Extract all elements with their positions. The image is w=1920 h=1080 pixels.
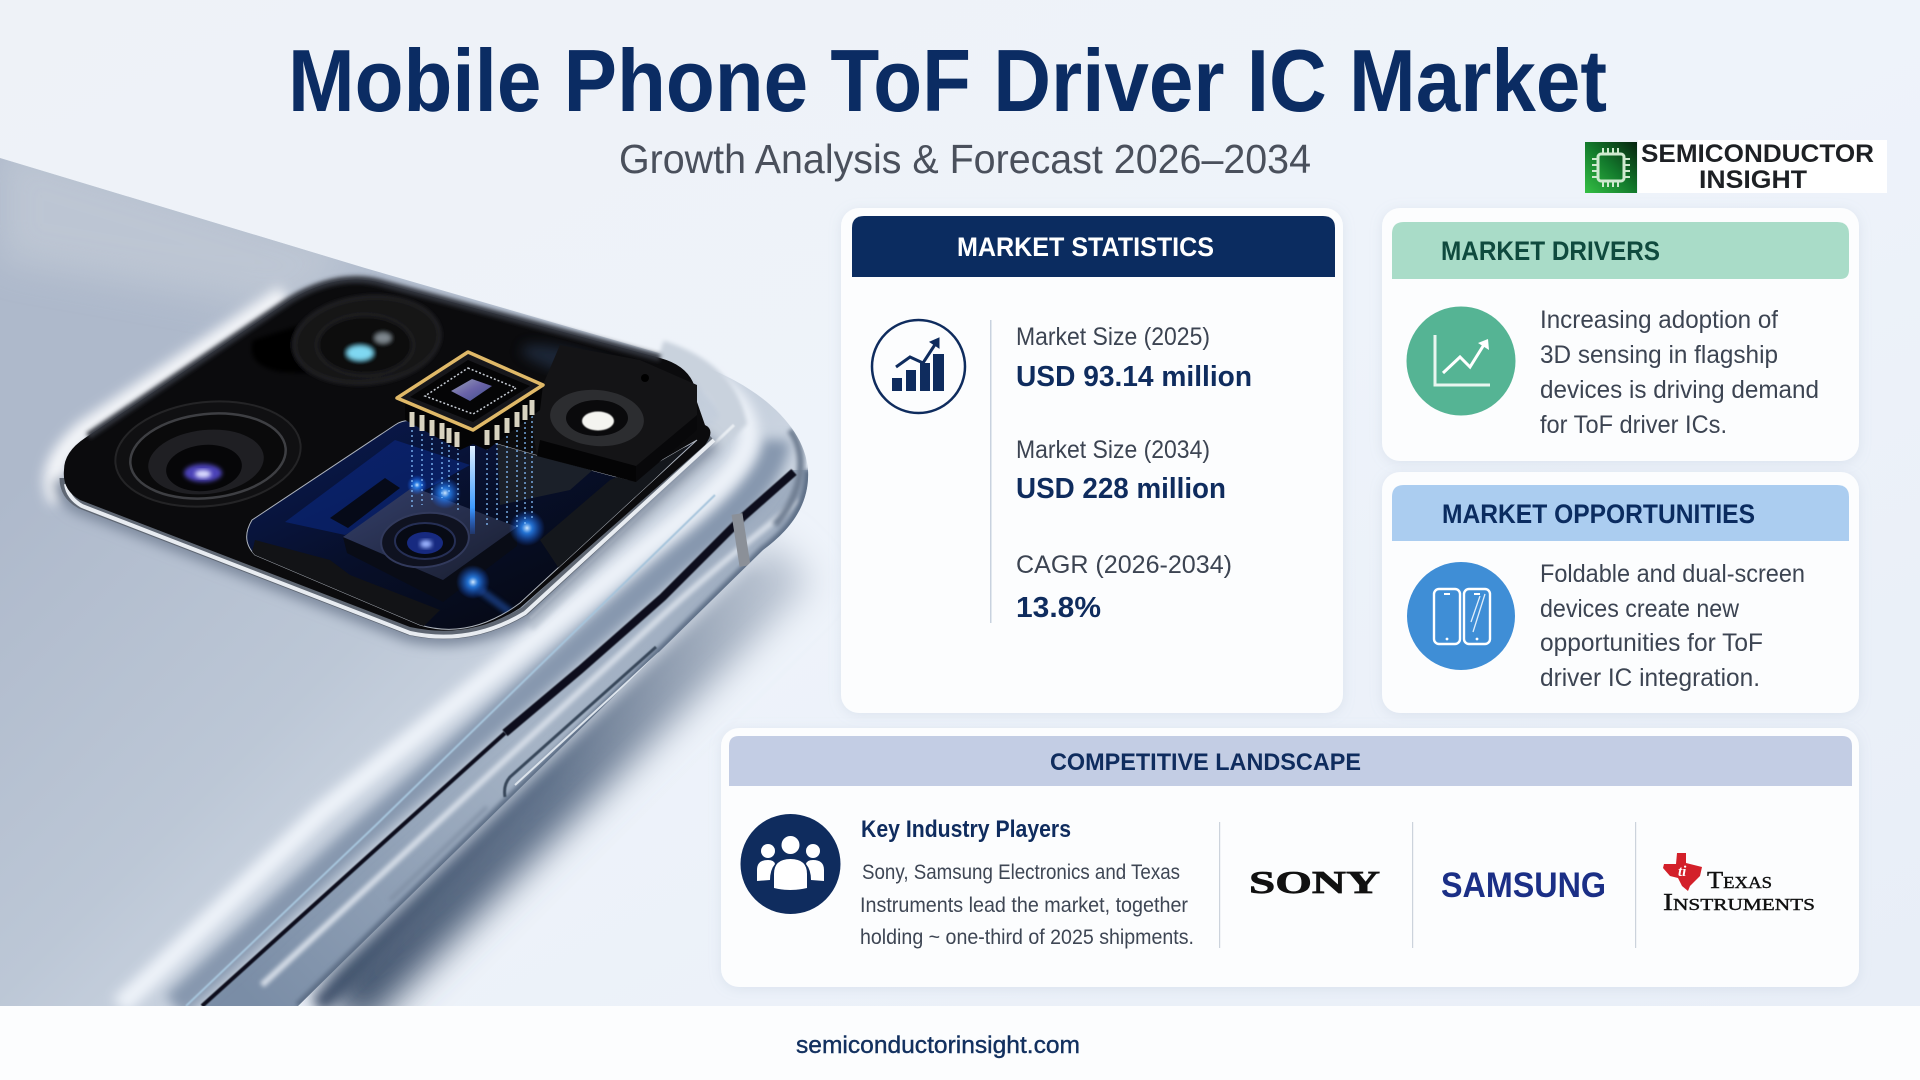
- heading: market opportunities: MARKET OPPORTUNITIES: [1442, 499, 1755, 529]
- text: drivers description: for ToF driver ICs.: [1540, 411, 1727, 439]
- icon: dual-screen phones: [1407, 562, 1515, 670]
- text: drivers description: 3D sensing in flagship: [1540, 341, 1778, 369]
- heading: market opportunities: [1392, 485, 1849, 541]
- stat: market size 2025: [1016, 323, 1252, 393]
- text: opportunities description: [1540, 560, 1805, 692]
- heading: market drivers: MARKET DRIVERS: [1441, 236, 1660, 266]
- logo: Texas Instruments: [1663, 853, 1815, 916]
- heading: competitive landscape: COMPETITIVE LANDSCAPE: [1050, 749, 1361, 776]
- heading: market drivers: [1392, 222, 1849, 279]
- text: key industry players: Sony, Samsung Electronics and Texas: [862, 861, 1180, 884]
- text: key industry players: holding ~ one-third of 2025 shipments.: [860, 926, 1194, 949]
- text: opportunities description: devices create new: [1540, 595, 1740, 623]
- flash module: [530, 345, 697, 482]
- panel: market opportunities: [1382, 472, 1859, 713]
- logo: Texas Instruments: Texas: [1707, 868, 1772, 894]
- icon: trend line: [1406, 306, 1516, 416]
- heading: market statistics: MARKET STATISTICS: [957, 232, 1214, 262]
- text: key industry players: [860, 816, 1194, 949]
- text: drivers description: Increasing adoption of: [1540, 306, 1778, 334]
- logo: Samsung: SAMSUNG: [1441, 866, 1606, 905]
- logo: Sony: SONY: [1249, 864, 1380, 900]
- text: opportunities description: opportunities for ToF: [1540, 629, 1763, 657]
- icon: main lens: [114, 400, 302, 508]
- stat: market size 2034: USD 228 million: [1016, 473, 1226, 505]
- icon: people group: [740, 814, 840, 914]
- stat: market size 2025: USD 93.14 million: [1016, 361, 1252, 393]
- stat: CAGR: 13.8%: [1016, 592, 1101, 624]
- panel: competitive landscape: [721, 728, 1859, 987]
- icon: upper lens: [252, 290, 444, 390]
- logo: Texas Instruments: ti: [1678, 864, 1687, 880]
- ToF beam and data streams: [412, 416, 532, 534]
- panel: market drivers: [1382, 208, 1859, 461]
- text: key industry players: Instruments lead the market, together: [860, 894, 1188, 917]
- text: drivers description: devices is driving demand: [1540, 376, 1819, 404]
- logo: Semiconductor Insight: SEMICONDUCTOR: [1641, 140, 1874, 168]
- camera module: [54, 280, 734, 637]
- icon: ToF driver IC chip: [397, 352, 543, 450]
- title: Mobile Phone ToF Driver IC Market: [288, 31, 1607, 130]
- logo: Semiconductor Insight: INSIGHT: [1699, 166, 1807, 194]
- logo: Semiconductor Insight: [1585, 140, 1887, 194]
- text: opportunities description: Foldable and dual-screen: [1540, 560, 1805, 588]
- text: key industry players: Key Industry Players: [861, 816, 1071, 843]
- stat: market size 2025: Market Size (2025): [1016, 323, 1210, 351]
- panel: market statistics: [841, 208, 1343, 713]
- stat: CAGR: CAGR (2026-2034): [1016, 551, 1232, 579]
- icon: growth bar chart: [872, 320, 965, 413]
- stat: CAGR: [1016, 551, 1232, 624]
- heading: market statistics: [852, 216, 1335, 277]
- hero image: phone with ToF camera module: [0, 140, 808, 1010]
- stat: market size 2034: [1016, 436, 1226, 505]
- logo: Texas Instruments: Instruments: [1663, 890, 1815, 916]
- internal cutaway with sensor module: [247, 421, 697, 630]
- heading: competitive landscape: [729, 736, 1852, 786]
- footer: website: [0, 1006, 1920, 1080]
- stat: market size 2034: Market Size (2034): [1016, 436, 1210, 464]
- text: drivers description: [1540, 306, 1819, 439]
- footer: website: semiconductorinsight.com: [796, 1032, 1080, 1059]
- subtitle: Growth Analysis & Forecast 2026–2034: [619, 136, 1311, 182]
- text: opportunities description: driver IC integration.: [1540, 664, 1760, 692]
